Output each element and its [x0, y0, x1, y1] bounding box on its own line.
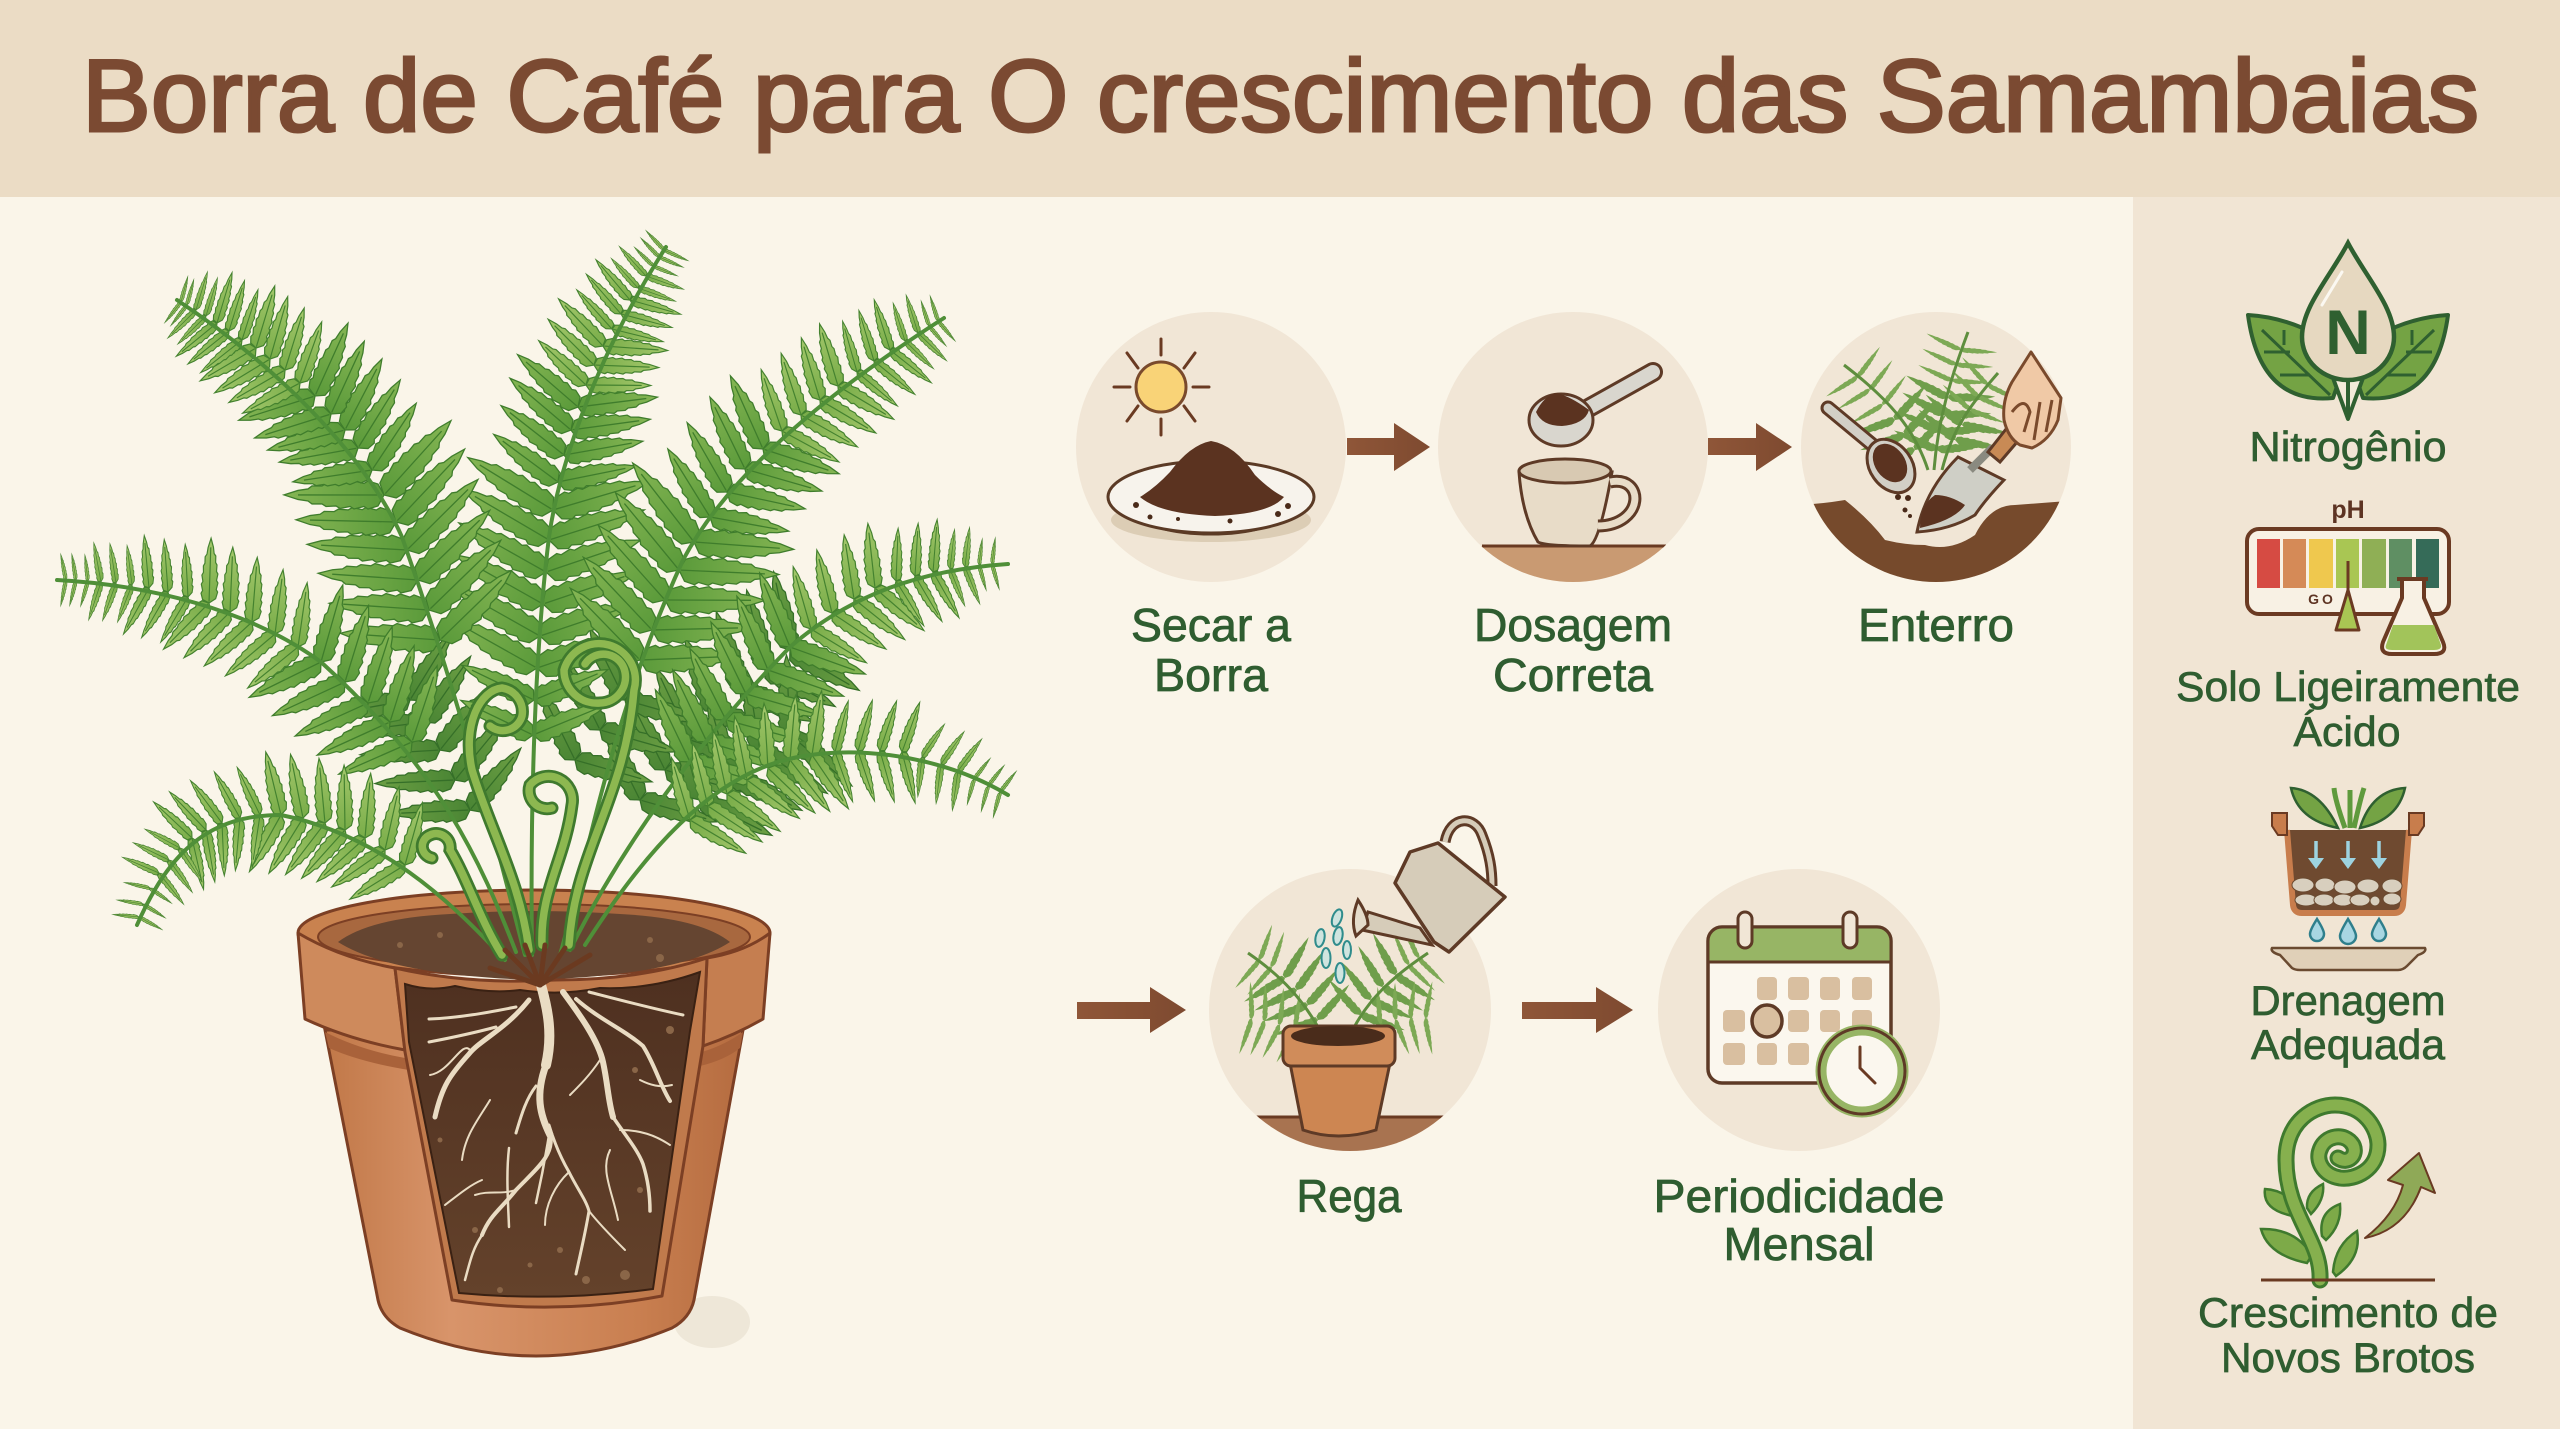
arrow 3 — [1077, 987, 1186, 1033]
icon: sun — [1114, 339, 1209, 435]
icon: pH scale: pH — [2331, 496, 2365, 524]
icon: leaves and drop — [2248, 243, 2448, 419]
icon: small fern — [1248, 953, 1428, 1040]
benefit: Solo Ligeiramente Ácido: Ácido — [2294, 708, 2400, 755]
step labels: Periodicidade — [1654, 1170, 1944, 1222]
step: Rega — [1200, 821, 1505, 1157]
step labels: Borra — [1154, 649, 1268, 701]
icon: drips and saucer — [2272, 919, 2425, 970]
frond: top left — [177, 300, 525, 955]
benefit: Crescimento de Novos Brotos: Crescimento de — [2198, 1289, 2498, 1336]
icon: trowel and hand — [1917, 352, 2061, 532]
frond: lower left — [137, 815, 505, 960]
icon: coffee pile on plate — [1108, 441, 1314, 542]
icon: fiddlehead — [2261, 1105, 2435, 1280]
benefit: Crescimento de Novos Brotos: Novos Brotos — [2221, 1334, 2475, 1381]
arrow 2 — [1708, 423, 1792, 471]
side panel background — [2133, 197, 2560, 1429]
soil crumbs — [397, 932, 674, 1293]
frond: lower right — [585, 751, 1008, 945]
benefit: Nitrogênio: Nitrogênio — [2250, 423, 2446, 470]
step: Dosagem Correta — [1438, 312, 1708, 582]
benefit: Nitrogênio — [2248, 243, 2448, 470]
frond: middle left — [57, 580, 516, 952]
icon: leaves and drop: N — [2325, 298, 2371, 368]
background fronds — [410, 650, 790, 810]
step: Secar a Borra — [1076, 312, 1346, 582]
table — [1256, 1116, 1444, 1151]
icon: clock — [1819, 1028, 1905, 1114]
roots — [429, 985, 683, 1280]
icon: water drops — [1314, 908, 1351, 983]
soil — [1814, 500, 2060, 582]
terracotta pot — [298, 890, 770, 1356]
icon: small pot — [1283, 1026, 1395, 1136]
benefit: Drenagem Adequada — [2250, 788, 2446, 1068]
step labels: Dosagem — [1474, 599, 1672, 651]
icon: cup — [1519, 459, 1635, 546]
arrow 1 — [1347, 423, 1430, 471]
step labels: Correta — [1493, 649, 1653, 701]
icon: scoop with coffee — [1529, 372, 1653, 446]
table — [1481, 544, 1666, 582]
step labels: Enterro — [1858, 599, 2014, 651]
title: Borra de Café para O crescimento das Samambaias — [82, 39, 2479, 153]
arrow 4 — [1522, 987, 1633, 1033]
icon: pH scale: GO — [2308, 591, 2336, 607]
fiddleheads — [422, 644, 635, 955]
soil cross-section — [405, 972, 700, 1297]
step labels — [1131, 599, 2014, 1270]
step labels: Rega — [1296, 1170, 1402, 1222]
potted fern illustration — [57, 247, 1008, 1356]
benefit: Solo Ligeiramente Ácido — [2176, 496, 2520, 755]
benefit: Drenagem Adequada: Adequada — [2251, 1021, 2446, 1068]
frond: middle right — [570, 564, 1008, 950]
header band — [0, 0, 2560, 197]
frond: top centre — [532, 247, 666, 955]
benefit: Drenagem Adequada: Drenagem — [2250, 977, 2446, 1024]
benefit: Solo Ligeiramente Ácido: Solo Ligeiramente — [2176, 663, 2520, 710]
step: Enterro — [1790, 312, 2080, 590]
icon: flask — [2382, 579, 2444, 654]
benefit: Crescimento de Novos Brotos — [2198, 1105, 2498, 1381]
icon: coffee spoon — [1828, 408, 1925, 518]
step labels: Secar a — [1131, 599, 1291, 651]
step labels: Mensal — [1724, 1218, 1874, 1270]
icon: small fern — [1844, 332, 1998, 470]
icon: calendar — [1708, 912, 1891, 1083]
icon: watering can — [1353, 821, 1505, 952]
frond: top right — [560, 318, 944, 955]
icon: growth arrow — [2365, 1153, 2435, 1238]
pot shadow — [674, 1296, 750, 1348]
icon: pH scale — [2247, 496, 2449, 630]
icon: drainage pot — [2272, 788, 2424, 913]
root crown — [490, 945, 590, 985]
step: Periodicidade Mensal — [1658, 869, 1940, 1151]
